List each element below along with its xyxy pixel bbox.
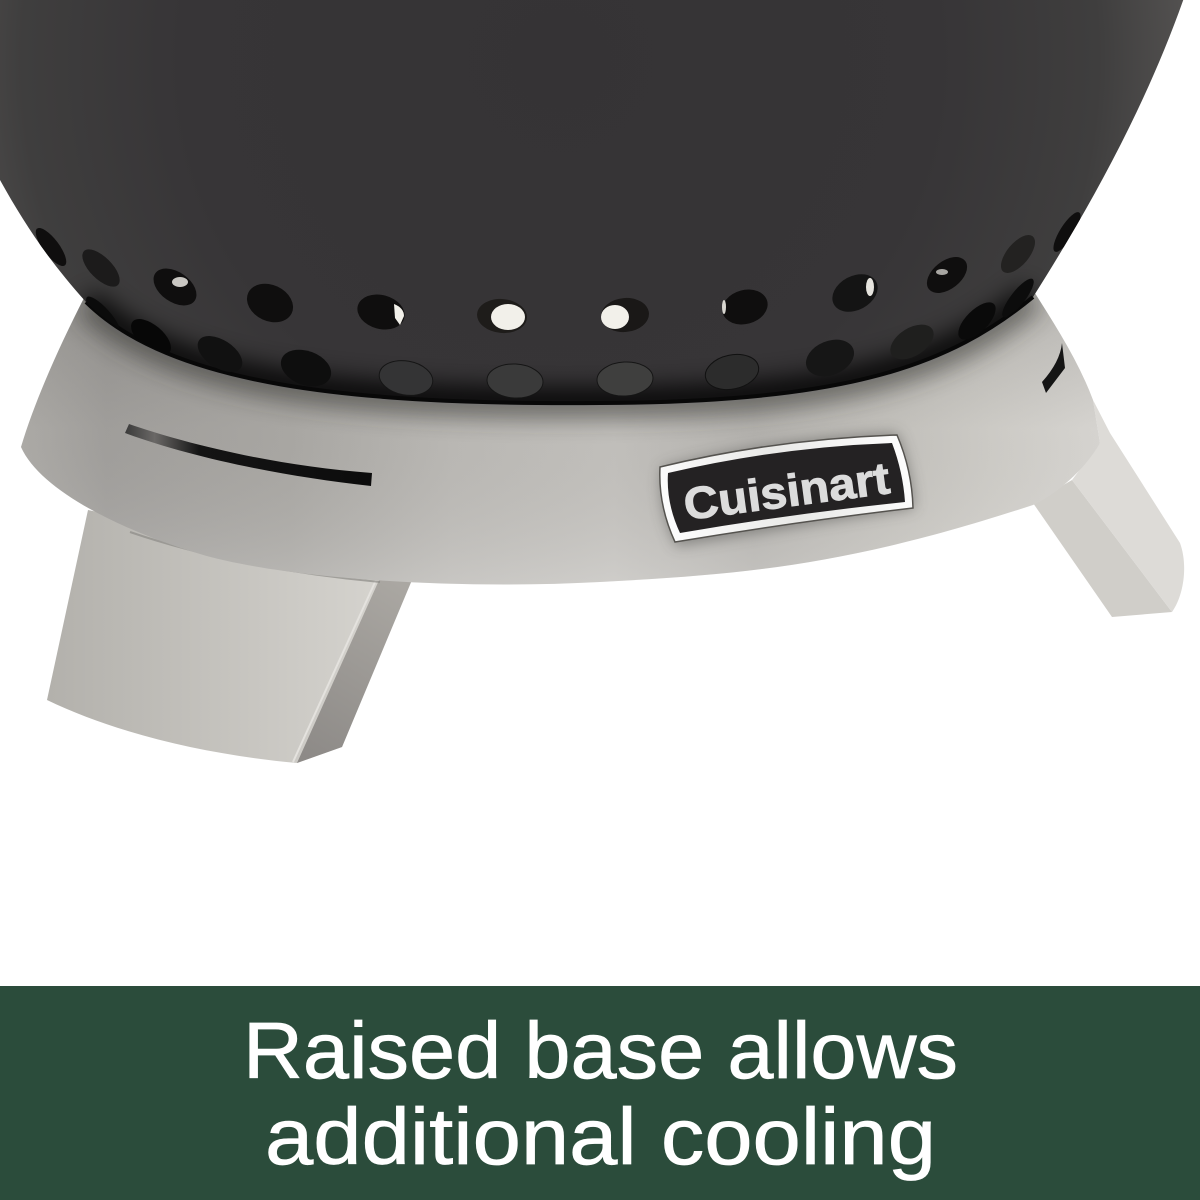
- upper row of vent holes: [31, 209, 1085, 335]
- left foot of the base: [47, 510, 412, 763]
- slot: right vent in the ring: [1042, 343, 1065, 393]
- lower row of vent holes: [82, 275, 1038, 399]
- black grill body: [0, 0, 1185, 403]
- caption line two: additional cooling: [265, 1092, 936, 1181]
- caption line one: Raised base allows: [243, 1006, 958, 1095]
- stainless steel base ring: [21, 290, 1100, 584]
- Cuisinart badge: [660, 433, 914, 546]
- badge wordmark: Cuisinart: [681, 452, 893, 530]
- highlights seen through upper holes: [172, 269, 948, 330]
- slot: left vent in the ring: [125, 424, 372, 486]
- caption banner: [0, 986, 1200, 1200]
- right foot of the base: [1033, 400, 1184, 617]
